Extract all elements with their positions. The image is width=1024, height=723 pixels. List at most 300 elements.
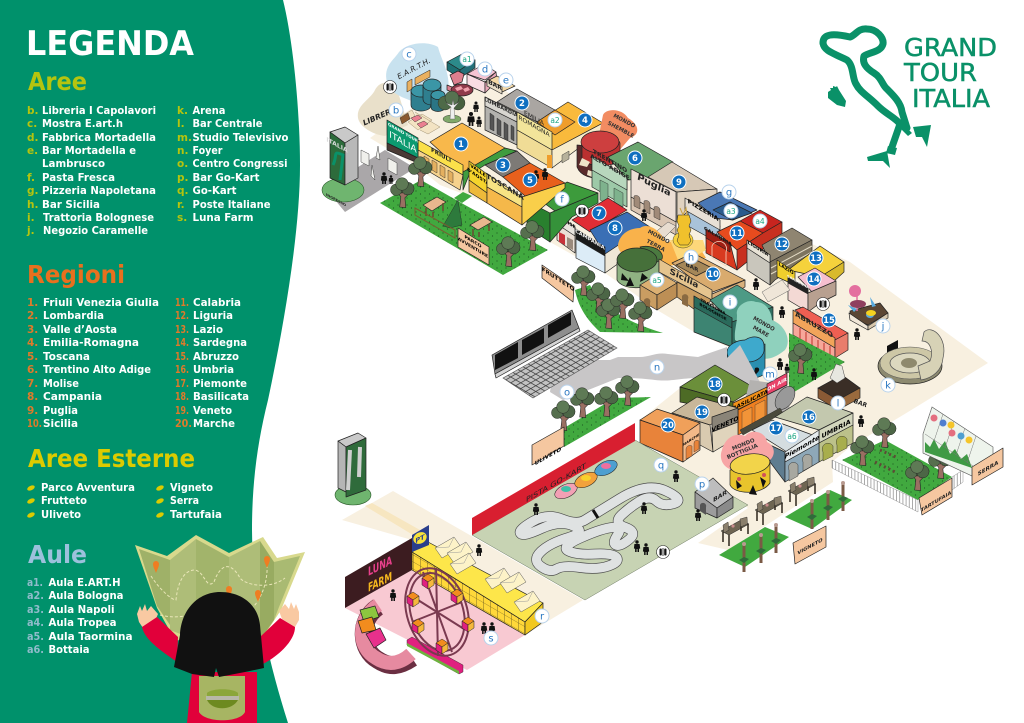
section: Regioni: 10. xyxy=(27,418,42,430)
section: Aule: a3. xyxy=(27,604,44,616)
building 2: Lombardia xyxy=(484,89,555,145)
building 3: Valle d'Aosta xyxy=(467,151,530,203)
building 6: Trentino Alto Adige: TRENTINO xyxy=(593,148,628,175)
building 1: Friuli Venezia Giulia xyxy=(418,123,517,190)
golden statue xyxy=(673,208,693,248)
section: Regioni: Sicilia xyxy=(43,418,78,430)
red sleeves xyxy=(142,617,295,664)
section: Regioni: 15. xyxy=(175,351,189,363)
cloud: Mondo Terra xyxy=(618,208,706,266)
outdoor: Vigneto xyxy=(719,477,852,572)
section: Regioni: Trentino Alto Adige xyxy=(43,364,151,376)
cloud: Mondo Mare xyxy=(735,301,788,359)
building 14: Sardegna: SARDEGNA xyxy=(787,274,809,290)
section: Aule: a4. xyxy=(27,617,44,629)
classroom markers: a1 xyxy=(462,55,472,64)
section: Aree: Go-Kart xyxy=(192,185,236,197)
numbered region markers: 2 xyxy=(519,99,525,109)
section: Aree: m. xyxy=(177,132,192,144)
section: Aree: Bar Centrale xyxy=(192,118,262,130)
building: Basilicata sign and wall: BASILICATA xyxy=(732,389,768,413)
section: Regioni: Liguria xyxy=(193,310,233,322)
drum: Mondo Mare xyxy=(727,337,765,379)
section: Regioni: Molise xyxy=(43,378,79,390)
numbered region markers: 11 xyxy=(731,229,743,239)
section: Aree: Bar Go-Kart xyxy=(192,172,260,184)
section: Regioni xyxy=(27,260,249,430)
section: Aule: Aula E.ART.H xyxy=(48,577,120,589)
lettered area markers: b xyxy=(393,106,399,116)
logo: Grand Tour Italia xyxy=(823,29,997,168)
sign: serra: SERRA xyxy=(978,459,999,478)
section: Aree: Pizzeria Napoletana xyxy=(42,185,156,197)
cloud: Mondo Bottiglia xyxy=(721,432,774,470)
building 1: Friuli Venezia Giulia: FRIULI xyxy=(431,148,451,164)
section: Regioni: 8. xyxy=(27,391,38,403)
section: Regioni: Abruzzo xyxy=(193,351,239,363)
numbered region markers: 7 xyxy=(596,209,602,219)
stair xyxy=(648,222,676,244)
section: Regioni: 20. xyxy=(175,418,192,430)
section: Regioni: 5. xyxy=(27,351,38,363)
section: Regioni: 11. xyxy=(175,297,189,309)
lettered area markers: m xyxy=(765,370,775,380)
classroom markers: a3 xyxy=(726,207,736,216)
sign: parco avventura xyxy=(458,228,489,265)
hands xyxy=(137,602,299,628)
teal storage drums xyxy=(411,79,445,112)
outdoor: Serra greenhouse xyxy=(923,407,1003,485)
numbered region markers: 13 xyxy=(810,254,822,264)
building 4: Emilia-Romagna: ROMAGNA xyxy=(518,114,550,139)
building 7: Molise: MOLISE xyxy=(556,213,576,231)
classroom markers: a6 xyxy=(787,432,797,441)
red wall xyxy=(472,423,635,535)
section: Aree: r. xyxy=(177,199,185,211)
section: Regioni: 14. xyxy=(175,337,189,349)
building 2: Lombardia: LOMBARDIA xyxy=(484,97,519,120)
paper map xyxy=(135,535,305,645)
people: central xyxy=(467,101,482,127)
section: Regioni: 17. xyxy=(175,378,189,390)
building g: Pizzeria: PIZZERIA xyxy=(688,197,718,223)
section: Aree: Poste Italiane xyxy=(192,199,270,211)
section: Regioni: 6. xyxy=(27,364,38,376)
section: Aree: Aree xyxy=(28,67,87,96)
building: Sicilia xyxy=(640,253,745,312)
numbered region markers: 1 xyxy=(458,140,464,150)
pink floor xyxy=(345,570,525,670)
section: Regioni: Puglia xyxy=(43,405,78,417)
building 19: Veneto: VENETO xyxy=(712,415,739,434)
building 19: Veneto xyxy=(672,397,739,452)
lettered area markers: p xyxy=(699,480,705,490)
numbered region markers: 3 xyxy=(500,161,506,171)
race track xyxy=(520,488,678,571)
section: Aree Esterne: Serra xyxy=(170,495,199,507)
section: Regioni: Valle d’Aosta xyxy=(43,324,117,336)
olive tree: central xyxy=(438,91,465,123)
building 12: Liguria xyxy=(747,228,812,285)
cloud: Mondo Mare: MONDO xyxy=(752,316,776,333)
stage with screens xyxy=(492,310,579,374)
mondo sghembo: salmon cloud and drum xyxy=(577,110,637,178)
bar centrale l: BAR xyxy=(852,398,868,409)
section: Regioni: 13. xyxy=(175,324,189,336)
mondo sghembo: salmon cloud and drum: MONDO xyxy=(612,113,636,130)
section: Aule: Bottaia xyxy=(48,644,90,656)
section: Regioni: Lazio xyxy=(193,324,223,336)
numbered region markers: 14 xyxy=(808,275,820,285)
panel: legend sidebar xyxy=(0,0,300,723)
area: gray entrance plaza xyxy=(325,146,415,212)
lettered area markers: c xyxy=(406,50,412,60)
lettered area markers: d xyxy=(482,64,488,76)
section: Aree: Libreria I Capolavori xyxy=(42,105,156,117)
cloud: Mondo Mare: MARE xyxy=(751,325,770,339)
foyer gray floor xyxy=(550,345,760,400)
building 3: Valle d'Aosta: VALLE xyxy=(470,163,486,180)
lettered area markers: i xyxy=(729,298,731,308)
section: Regioni: Campania xyxy=(43,391,102,403)
building f: pasta fresca xyxy=(527,182,598,242)
section: Aule: Aula Taormina xyxy=(48,631,132,643)
building 15: Abruzzo: ABRUZZO xyxy=(795,310,833,340)
fabbrica mortadella xyxy=(447,64,497,96)
building 3: Valle d'Aosta: D'AOSTA xyxy=(467,167,489,188)
classroom markers: a4 xyxy=(755,217,765,226)
building 8: Campania xyxy=(575,212,650,273)
building i: Trattoria Bolognese: BOLOGNESE xyxy=(699,302,727,323)
section: Aree: Luna Farm xyxy=(192,212,254,224)
section: Aree: g. xyxy=(27,185,39,197)
building i: Trattoria Bolognese xyxy=(694,285,773,350)
mondo sghembo: salmon cloud and drum: SHEMBLE xyxy=(606,121,635,140)
sign: Gran Tour Italia building: GRAND TOUR xyxy=(388,122,419,145)
sign: uliveto: ULIVETO xyxy=(535,447,561,467)
section: Aree Esterne: Vigneto xyxy=(170,482,213,494)
studio televisivo: ON AIR xyxy=(767,376,788,393)
cloud: Mondo Bottiglia: MONDO xyxy=(731,438,756,452)
curved ride xyxy=(358,605,412,665)
building 8: Campania: CAMPANIA xyxy=(575,228,605,252)
body and backpack xyxy=(187,672,257,723)
building: Basilicata sign and wall xyxy=(732,387,768,435)
outdoor: Tartufaia xyxy=(832,418,963,515)
section: Regioni: 19. xyxy=(175,405,189,417)
section: Regioni: Veneto xyxy=(193,405,232,417)
tables xyxy=(721,517,749,546)
building 5: Toscana: TOSCANA xyxy=(486,171,524,202)
building 4: Emilia-Romagna: EMILIA xyxy=(524,109,544,128)
sign: parco avventura: PARCO xyxy=(465,234,481,250)
bar mortadella: BAR xyxy=(488,79,502,92)
section: Regioni: Marche xyxy=(193,418,235,430)
track floor xyxy=(472,440,748,600)
section: Aree: h. xyxy=(27,199,38,211)
second totem xyxy=(335,433,371,505)
black hair xyxy=(174,592,264,677)
section: Aree: Centro Congressi xyxy=(192,158,288,170)
numbered region markers: 8 xyxy=(612,224,618,234)
building i: Trattoria Bolognese: TRATTORIA xyxy=(700,297,726,317)
building: Sicilia: Sicilia xyxy=(670,267,698,291)
section: Aree: q. xyxy=(177,185,189,197)
sign: Gran Tour Italia building xyxy=(387,120,419,163)
poste italiane building xyxy=(411,525,543,635)
section: Aule: a2. xyxy=(27,590,44,602)
logo wordmark xyxy=(903,33,997,113)
building 9: Puglia xyxy=(631,162,717,244)
vines xyxy=(739,542,749,572)
cloud: libreria: LIBRERIA xyxy=(361,104,400,127)
building g: Pizzeria xyxy=(685,192,757,242)
people: map figures xyxy=(390,168,864,634)
logo: knee bands and boots xyxy=(867,124,931,168)
building: Sicilia: BAR xyxy=(686,262,699,274)
numbered region markers: 15 xyxy=(823,316,835,326)
section: Aree xyxy=(26,67,288,237)
outdoor: Uliveto xyxy=(532,376,651,467)
building 17: Piemonte xyxy=(752,420,820,482)
entrance banners xyxy=(361,146,397,180)
net xyxy=(443,200,462,228)
logo wordmark: GRAND xyxy=(904,33,997,62)
cloud: mostra E.ART.H xyxy=(386,43,449,112)
lettered area markers xyxy=(389,47,895,645)
outdoor: Frutteto xyxy=(542,265,663,333)
lettered area markers: f xyxy=(560,194,564,206)
numbered region markers: 19 xyxy=(696,408,708,418)
wc icons xyxy=(384,80,830,558)
drum: Mondo Terra xyxy=(617,246,662,288)
section: Regioni: Emilia-Romagna xyxy=(43,337,139,349)
section: Aule: Aula Napoli xyxy=(48,604,114,616)
vineyard lawns xyxy=(719,527,789,567)
congress center xyxy=(492,310,618,400)
lettered area markers: s xyxy=(488,634,494,644)
building 14: Sardegna xyxy=(787,268,836,312)
building 6: Trentino Alto Adige: ALTO ADIGE xyxy=(590,152,630,182)
arena k xyxy=(878,330,944,384)
section: Regioni: Basilicata xyxy=(193,391,249,403)
go-kart area xyxy=(472,423,748,600)
logo: Italy line drawing xyxy=(823,29,907,147)
section: Aree: Negozio Caramelle xyxy=(43,225,148,237)
section: Regioni: 12. xyxy=(175,310,189,322)
numbered region markers: 17 xyxy=(770,424,782,434)
logo: hand xyxy=(828,86,846,107)
lettered area markers: k xyxy=(885,380,891,392)
cloud: mostra E.ART.H: E.A.R.T.H. xyxy=(396,56,432,81)
building 17: Piemonte: Piemonte xyxy=(785,432,820,461)
seating xyxy=(503,330,617,398)
section: Regioni: 9. xyxy=(27,405,38,417)
numbered region markers: 5 xyxy=(527,176,533,186)
sign: tartufaia: TARTUFAIA xyxy=(921,490,952,514)
section: Regioni: 7. xyxy=(27,378,38,390)
section: Aree: e. xyxy=(27,145,38,157)
numbered region markers: 9 xyxy=(676,178,682,188)
sign: parco avventura: AVVENTURE xyxy=(458,236,488,260)
lettered area markers: q xyxy=(658,460,664,472)
section: Aree: i. xyxy=(27,212,35,224)
building 11: Calabria xyxy=(704,221,782,270)
section: Aule: Aula Bologna xyxy=(48,590,124,602)
section: Regioni: 3. xyxy=(27,324,38,336)
lettered area markers: r xyxy=(540,612,545,622)
building 13: Lazio: LAZIO xyxy=(778,261,794,277)
outdoor: Parco Avventura xyxy=(380,157,548,275)
numbered region markers: 20 xyxy=(662,421,674,431)
classroom markers: a5 xyxy=(652,276,662,285)
luna farm wall lettering xyxy=(368,553,392,595)
illustration: girl reading a map xyxy=(135,535,305,723)
section: Aule xyxy=(27,540,132,656)
section: Aree: Bar Mortadella e xyxy=(42,145,136,157)
section: Aree: Fabbrica Mortadella xyxy=(42,132,156,144)
lawn near Abruzzo xyxy=(789,333,845,395)
building 12: Liguria: LIGURIA xyxy=(748,240,768,258)
section: Regioni: Toscana xyxy=(43,351,90,363)
sign: Gran Tour Italia building: ITALIA xyxy=(389,130,417,156)
section: Regioni: Regioni xyxy=(27,260,125,289)
cloud: libreria xyxy=(358,83,440,136)
section: Aree: f. xyxy=(27,172,35,184)
section: Aree: Lambrusco xyxy=(42,158,105,170)
luna farm wall lettering: FARM xyxy=(368,569,392,595)
section: Aule: a1. xyxy=(27,577,43,589)
wall text: PISTA GO-KART xyxy=(526,461,586,504)
section: Aree: j. xyxy=(26,225,35,237)
lettered area markers: j xyxy=(881,322,884,332)
building 9: Puglia: Puglia xyxy=(637,172,671,200)
sign: entrance totem xyxy=(322,127,364,207)
logo wordmark: ITALIA xyxy=(912,84,990,113)
cloud: Mondo Bottiglia: BOTTIGLIA xyxy=(726,443,760,461)
numbered region markers: 10 xyxy=(707,270,719,280)
section: Aree: o. xyxy=(177,158,188,170)
luna farm wall lettering: LUNA xyxy=(368,553,392,579)
poste italiane building: PT xyxy=(415,533,425,545)
floor xyxy=(550,360,618,400)
building 16: Umbria xyxy=(775,397,853,462)
parco lawn xyxy=(380,180,548,275)
lettered area markers: n xyxy=(654,362,660,374)
building 5: Toscana xyxy=(486,163,565,225)
building 6: Trentino Alto Adige xyxy=(590,142,673,207)
trees xyxy=(408,157,432,187)
numbered region markers: 6 xyxy=(632,154,638,164)
stairs near Liguria xyxy=(762,280,790,302)
numbered region markers: 16 xyxy=(803,413,815,423)
PT sign xyxy=(412,525,429,552)
section: Aree Esterne xyxy=(26,444,222,521)
sign: frutteto: FRUTTETO xyxy=(542,266,574,293)
section: Aree: Arena xyxy=(192,105,226,117)
section: Aree: Trattoria Bolognese xyxy=(43,212,154,224)
section: Regioni: 18. xyxy=(175,391,189,403)
section: Regioni: 1. xyxy=(27,297,38,309)
karts xyxy=(552,457,620,502)
section: Aree: Studio Televisivo xyxy=(192,132,288,144)
negozio caramelle j xyxy=(848,285,888,330)
numbered region markers: 18 xyxy=(709,380,721,390)
building 13: Lazio xyxy=(777,246,844,285)
bar go-kart xyxy=(695,478,733,518)
section: Regioni: Umbria xyxy=(193,364,234,376)
section: Regioni: 2. xyxy=(27,310,38,322)
lettered area markers: g xyxy=(726,188,732,198)
section: Regioni: Lombardia xyxy=(43,310,104,322)
numbered region markers: 4 xyxy=(582,116,588,126)
building 18: Basilicata xyxy=(680,365,755,412)
section: Regioni: 4. xyxy=(27,337,38,349)
lettered area markers: h xyxy=(688,252,694,264)
building 15: Abruzzo xyxy=(793,307,848,358)
sign: entrance totem: ITALIA xyxy=(326,136,348,155)
bottle rack xyxy=(740,408,783,435)
numbered region markers xyxy=(454,96,836,435)
section: Aree: n. xyxy=(177,145,188,157)
bar go-kart: BAR xyxy=(713,488,727,504)
section: Aule: Aula Tropea xyxy=(48,617,116,629)
section: Aree: Pasta Fresca xyxy=(42,172,115,184)
section: Aree: d. xyxy=(27,132,39,144)
section: Aree: p. xyxy=(177,172,189,184)
ferris wheel xyxy=(395,560,479,674)
classroom markers xyxy=(460,52,799,443)
logo wordmark: TOUR xyxy=(903,58,977,87)
section: Aree Esterne: Tartufaia xyxy=(170,509,222,521)
section: Aree: k. xyxy=(177,105,188,117)
sign: entrance totem: INGRESSO xyxy=(326,193,346,207)
dark wall xyxy=(345,538,412,608)
lettered area markers: e xyxy=(503,76,509,86)
section: Aree Esterne: Frutteto xyxy=(41,495,87,507)
building 20: Marche: MARCHE xyxy=(683,432,700,447)
section: Aree: b. xyxy=(27,105,39,117)
libreria furniture xyxy=(400,110,440,134)
building 20: Marche xyxy=(640,409,700,462)
cream strip xyxy=(342,491,583,635)
classroom markers: a2 xyxy=(550,116,560,125)
sidebar green background xyxy=(0,0,300,723)
section: Aree: Bar Sicilia xyxy=(42,199,100,211)
section: Regioni: 16. xyxy=(175,364,189,376)
section: Aule: Aule xyxy=(28,540,87,569)
section: Aree: l. xyxy=(177,118,185,130)
section: Aule: a6. xyxy=(27,644,44,656)
section: Aree: Foyer xyxy=(192,145,223,157)
section: Aree Esterne: Uliveto xyxy=(41,509,81,521)
section: Aree: s. xyxy=(177,212,187,224)
building 4: Emilia-Romagna xyxy=(517,102,603,168)
section: Regioni: Calabria xyxy=(193,297,241,309)
picnic tables xyxy=(423,197,446,211)
floor: main walkway xyxy=(370,80,988,550)
building 11: Calabria: CALABRIA xyxy=(704,226,733,249)
section: Aule: a5. xyxy=(27,631,44,643)
tree: lawn near Abruzzo xyxy=(788,344,812,374)
section: Regioni: Friuli Venezia Giulia xyxy=(43,297,159,309)
aula a1 block xyxy=(447,54,475,78)
bar mortadella xyxy=(485,76,515,94)
bar centrale l xyxy=(818,364,868,410)
heading: Legenda: LEGENDA xyxy=(26,24,195,64)
section: Aree: c. xyxy=(27,118,37,130)
cloud: Mondo Terra: TERRA xyxy=(645,239,666,254)
